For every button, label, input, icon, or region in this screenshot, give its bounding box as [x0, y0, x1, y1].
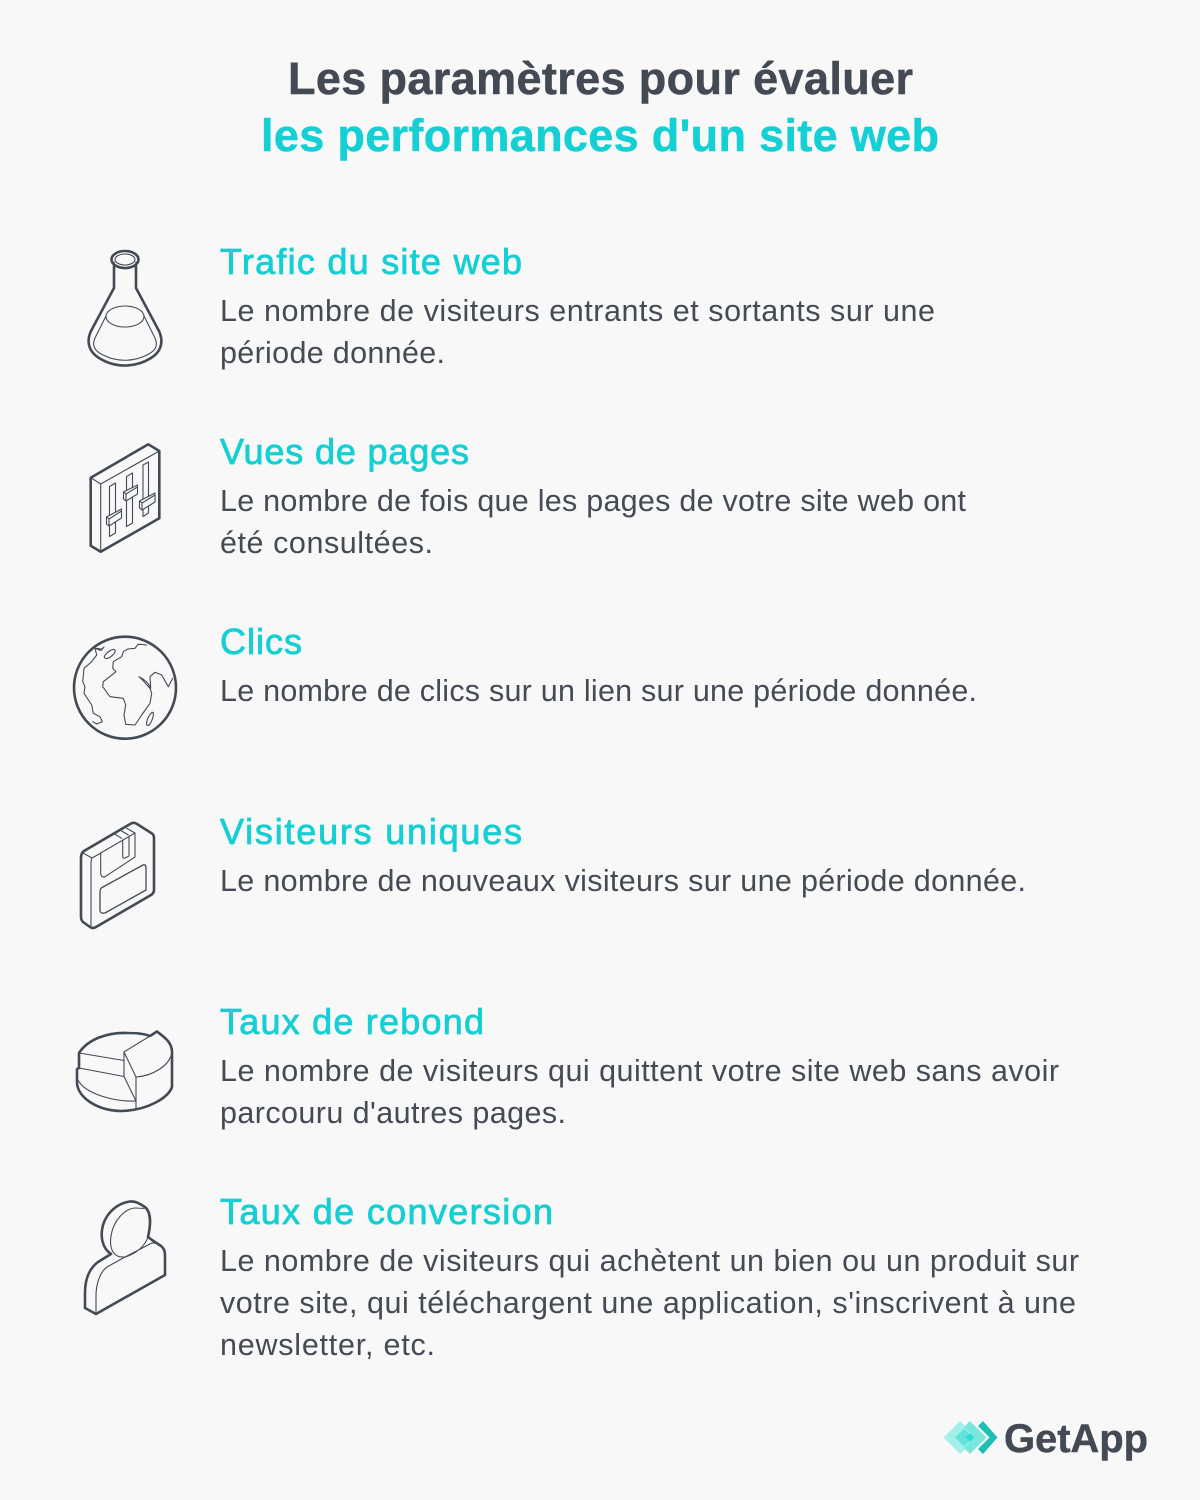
description: Le nombre de clics sur un lien sur une période donnée. [220, 674, 977, 708]
wordmark: GetApp [1004, 1417, 1148, 1461]
heading: Trafic du site web [220, 241, 522, 282]
title: les performances d'un site web [261, 110, 939, 161]
panel: Trafic du site web [89, 241, 935, 370]
description [220, 1054, 1059, 1130]
description: Le nombre de visiteurs entrants et sortants sur une [220, 294, 935, 328]
description: été consultées. [220, 526, 433, 560]
panel: Vues de pages [91, 431, 967, 560]
icon: user [85, 1201, 165, 1314]
heading: Clics [220, 621, 302, 662]
logo: GetApp [944, 1417, 1148, 1461]
panel: Taux de conversion [85, 1191, 1079, 1362]
icon: globe [74, 637, 176, 739]
description: newsletter, etc. [220, 1328, 435, 1362]
description [220, 1244, 1079, 1362]
icon: floppy disk [81, 823, 154, 928]
description [220, 294, 935, 370]
heading: Vues de pages [220, 431, 469, 472]
title [261, 53, 939, 161]
heading: Taux de rebond [220, 1001, 484, 1042]
icon: flask [89, 251, 161, 366]
panel: Clics [74, 621, 977, 739]
icon: sliders [91, 444, 159, 552]
description [220, 484, 967, 560]
icon: pie chart [77, 1032, 172, 1111]
heading: Taux de conversion [220, 1191, 553, 1232]
description: période donnée. [220, 336, 445, 370]
description: parcouru d'autres pages. [220, 1096, 566, 1130]
panel: Visiteurs uniques [81, 811, 1026, 928]
heading: Visiteurs uniques [220, 811, 522, 852]
description: Le nombre de fois que les pages de votre site web ont [220, 484, 967, 518]
description: Le nombre de visiteurs qui quittent votre site web sans avoir [220, 1054, 1059, 1088]
description: Le nombre de nouveaux visiteurs sur une période donnée. [220, 864, 1026, 898]
icon: logo chevrons [944, 1421, 998, 1454]
description: votre site, qui téléchargent une application, s'inscrivent à une [220, 1286, 1076, 1320]
description: Le nombre de visiteurs qui achètent un bien ou un produit sur [220, 1244, 1079, 1278]
panel: Taux de rebond [77, 1001, 1059, 1130]
title: Les paramètres pour évaluer [288, 53, 913, 104]
